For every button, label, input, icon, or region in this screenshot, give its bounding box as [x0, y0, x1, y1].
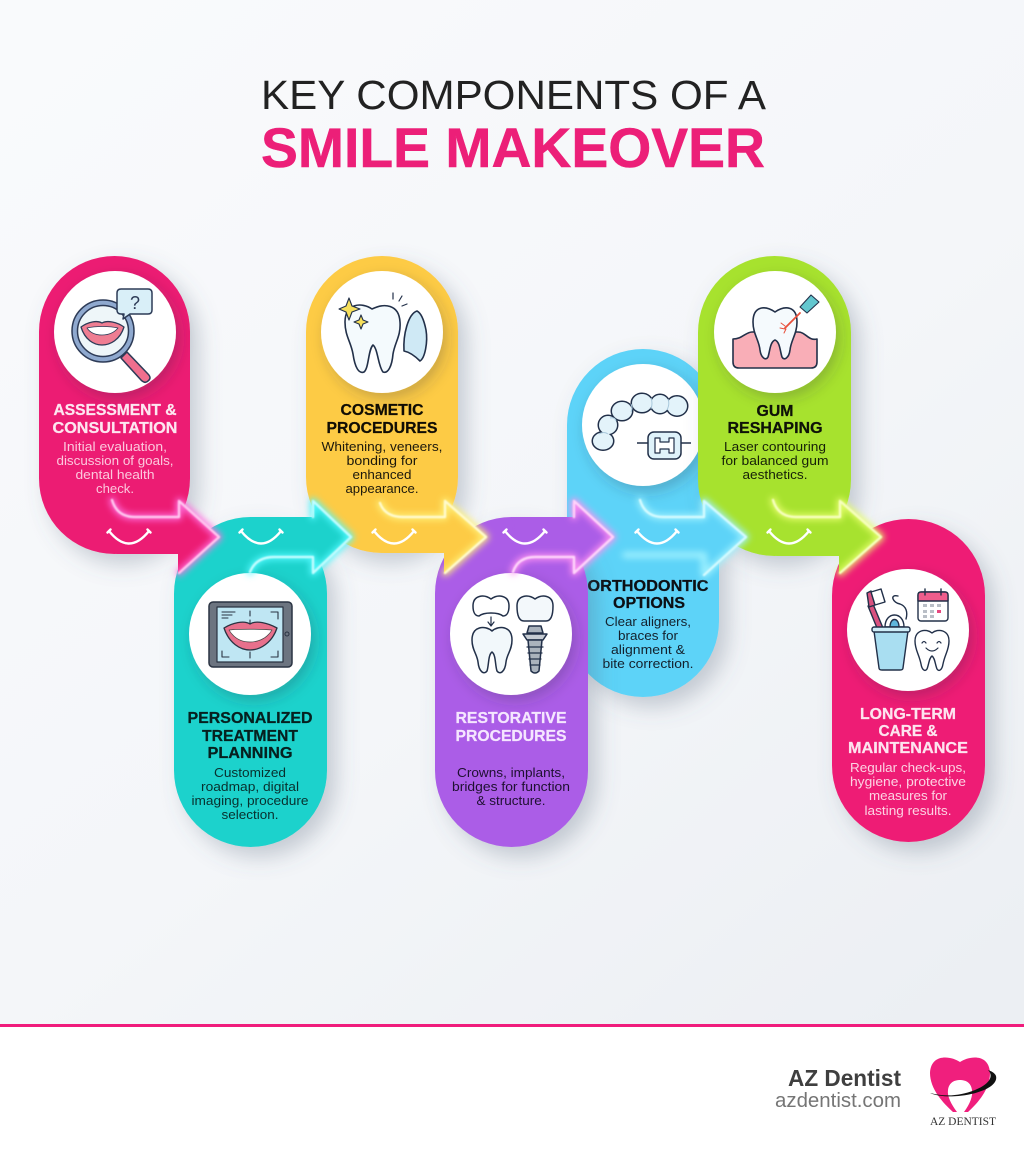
icon: tooth with veneer	[339, 293, 427, 372]
description: bonding for	[346, 453, 418, 468]
heading: PROCEDURES	[456, 728, 566, 745]
description: measures for	[869, 788, 948, 803]
heading: PLANNING	[208, 745, 292, 762]
description: discussion of goals,	[56, 453, 174, 468]
arrow: cosmetic to restorative	[372, 501, 486, 573]
heading	[456, 710, 566, 745]
arrow: restorative to orthodontic	[504, 501, 613, 573]
description: roadmap, digital	[201, 779, 299, 794]
icon detail: question mark: ?	[130, 293, 140, 313]
footer	[0, 1024, 1024, 1154]
panel: assessment and consultation	[39, 256, 190, 554]
description	[322, 439, 442, 496]
title	[261, 72, 767, 179]
smile	[108, 530, 150, 544]
heading: PROCEDURES	[326, 420, 438, 437]
description: bite correction.	[602, 656, 694, 671]
description: Whitening, veneers,	[322, 439, 442, 454]
arrow: treatment planning to cosmetic	[240, 501, 351, 573]
arrow: assessment to treatment planning	[108, 500, 219, 573]
smile	[372, 530, 416, 544]
icon: tablet with smile scan	[209, 602, 292, 667]
description: Laser contouring	[724, 439, 826, 454]
title: KEY COMPONENTS OF A	[261, 72, 767, 118]
description	[452, 765, 570, 808]
description: for balanced gum	[722, 453, 828, 468]
description: lasting results.	[864, 803, 952, 818]
panel: restorative procedures	[435, 517, 588, 847]
smile	[636, 530, 678, 544]
description: & structure.	[476, 793, 546, 808]
description: dental health	[76, 467, 154, 482]
description: bridges for function	[452, 779, 570, 794]
icon: aligner and brace	[593, 394, 691, 459]
heading: RESHAPING	[728, 420, 822, 437]
heading	[52, 402, 178, 437]
heading: CARE &	[878, 723, 938, 740]
description: Clear aligners,	[605, 614, 691, 629]
heading	[848, 706, 968, 757]
panel: long-term care and maintenance	[832, 519, 985, 842]
logo: AZ DENTIST	[930, 1114, 997, 1128]
arrow: gum to long-term care	[768, 500, 881, 573]
heading: ORTHODONTIC	[588, 578, 708, 595]
heading: RESTORATIVE	[456, 710, 566, 727]
brand url: azdentist.com	[775, 1090, 901, 1112]
description	[602, 614, 694, 671]
description: braces for	[618, 628, 679, 643]
heading: GUM	[756, 403, 794, 420]
smile	[240, 530, 282, 544]
description: Initial evaluation,	[63, 439, 167, 454]
description	[56, 439, 174, 496]
description	[192, 765, 308, 822]
heading: LONG-TERM	[860, 706, 956, 723]
description: imaging, procedure	[192, 793, 308, 808]
description: enhanced	[352, 467, 412, 482]
description	[722, 439, 828, 482]
description: Customized	[214, 765, 286, 780]
icon details: calendar dots	[923, 604, 941, 618]
arrow: orthodontic to gum	[625, 500, 746, 575]
heading: CONSULTATION	[52, 420, 178, 437]
icon: gum and laser	[733, 295, 819, 368]
heading: OPTIONS	[613, 595, 685, 612]
description: Regular check-ups,	[850, 760, 966, 775]
panel: cosmetic procedures	[306, 256, 458, 553]
description: check.	[96, 481, 134, 496]
description: hygiene, protective	[850, 774, 966, 789]
panel: orthodontic options	[567, 349, 719, 697]
heading: MAINTENANCE	[848, 740, 968, 757]
description: aesthetics.	[742, 467, 808, 482]
heading	[588, 578, 708, 612]
heading: COSMETIC	[340, 402, 424, 419]
heading	[728, 403, 822, 437]
smile	[504, 530, 546, 544]
heading: ASSESSMENT &	[54, 402, 176, 419]
icon: crown, tooth and implant	[472, 596, 553, 673]
heading	[326, 402, 438, 437]
description	[850, 760, 966, 818]
heading: TREATMENT	[202, 728, 299, 745]
panel: personalized treatment planning	[174, 517, 327, 847]
heading	[188, 710, 312, 762]
description: selection.	[222, 807, 278, 822]
brand name: AZ Dentist	[788, 1065, 901, 1091]
smile	[768, 530, 810, 544]
description: Crowns, implants,	[457, 765, 565, 780]
description: appearance.	[346, 481, 418, 496]
icon: magnifier with lips	[72, 289, 152, 382]
title: SMILE MAKEOVER	[261, 116, 765, 179]
panel: gum reshaping	[698, 256, 851, 556]
logo	[930, 1058, 997, 1128]
description: alignment &	[611, 642, 685, 657]
heading: PERSONALIZED	[188, 710, 312, 727]
icon: dental care kit	[867, 589, 949, 670]
